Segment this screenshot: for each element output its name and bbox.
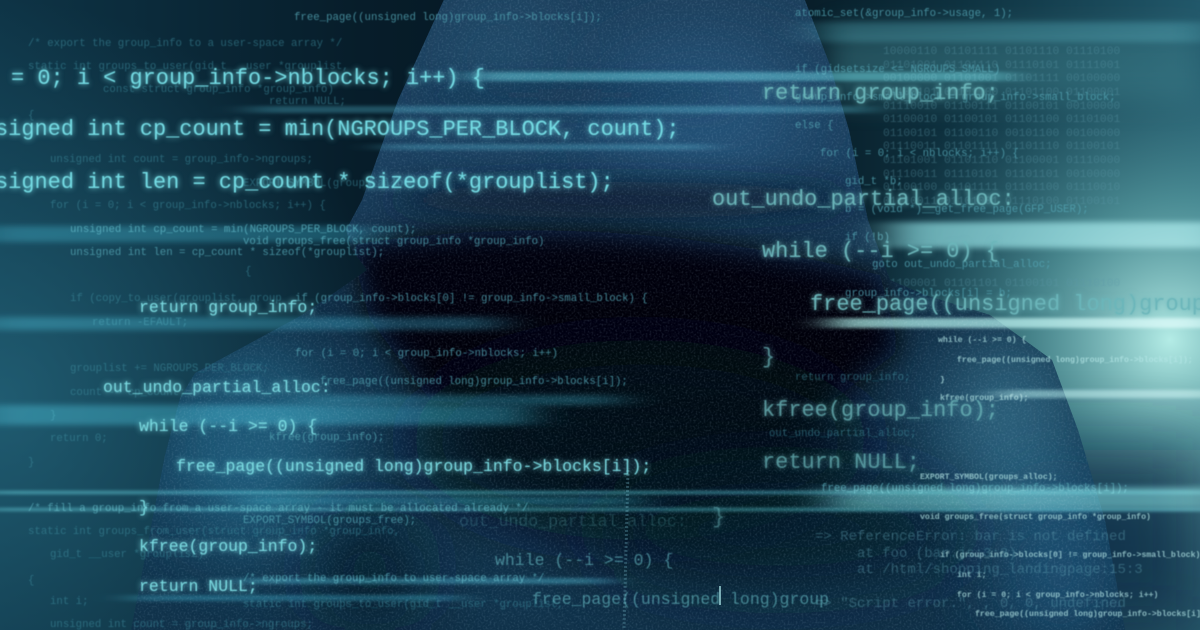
- small code right: if (!b): [845, 232, 890, 244]
- small code left: const struct group_info *group_info): [103, 84, 334, 96]
- small code left: unsigned int len = cp_count * sizeof(*grouplist);: [70, 247, 384, 259]
- small code left: int i;: [50, 596, 88, 608]
- small code left: count -= cp_count;: [70, 387, 185, 399]
- medium code left: [103, 298, 651, 596]
- small code left: EXPORT_SYMBOL(groups_alloc);: [243, 178, 423, 190]
- small code right: group_info->blocks[i] = b;: [845, 288, 1012, 300]
- large code right: [712, 81, 1200, 530]
- binary code block: 01110011 01101111 01101110 01100101: [883, 141, 1120, 153]
- medium code left: return NULL;: [139, 577, 258, 596]
- binary code block: 01110010 01100111 01100101 00100000: [883, 101, 1120, 113]
- large code right: return group_info;: [762, 81, 999, 106]
- cursor: [719, 586, 721, 605]
- small code right: int i;: [957, 570, 986, 580]
- small code right: for (i = 0; i < group_info->nblocks; i++): [957, 590, 1158, 600]
- large code right: return NULL;: [762, 450, 920, 475]
- left shoulder light: [165, 330, 335, 550]
- medium code left: out_undo_partial_alloc:: [103, 378, 331, 397]
- small code right: b = (void *)__get_free_page(GFP_USER);: [845, 204, 1089, 216]
- console error messages: => "Script error.", , 0, 0, undefined: [815, 596, 1126, 612]
- dim code center bottom: free_page((unsigned long)group: [532, 590, 829, 609]
- small code left: /* export the group_info to a user-space array */: [28, 38, 342, 50]
- chest shadow: [410, 340, 870, 540]
- small code right: goto out_undo_partial_alloc;: [872, 259, 1052, 271]
- small code left: if (group_info->blocks[0] != group_info->small_block) {: [295, 293, 648, 305]
- small code left: return 0;: [50, 433, 108, 445]
- small code right: group_info->small_block = group_info->small_block;: [795, 92, 1116, 104]
- large code left: = 0; i < group_info->nblocks; i++) {: [11, 66, 485, 91]
- binary code block: 01100001 01101101 01100101 01110100: [883, 278, 1120, 290]
- binary code block: 01100101 01101100 01101100 01100001: [883, 87, 1120, 99]
- medium code left: kfree(group_info);: [139, 537, 317, 556]
- console error messages: at foo (bar.js:3:3): [857, 546, 1017, 562]
- medium code left: free_page((unsigned long)group_info->blocks[i]);: [176, 457, 651, 476]
- console error messages: => ReferenceError: bar is not defined: [815, 529, 1126, 545]
- small code left: kfree(group_info);: [269, 432, 384, 444]
- small code left: void groups_free(struct group_info *group_info): [243, 236, 544, 248]
- hoodie zipper: [624, 470, 628, 630]
- binary code block: 00100000 01101001 01101111 00100000: [883, 73, 1120, 85]
- large code right: while (--i >= 0) {: [762, 239, 999, 264]
- small code left: }: [50, 410, 56, 422]
- large code right: out_undo_partial_alloc:: [712, 187, 1015, 212]
- small code right: free_page((unsigned long)group_info->blocks[i]);: [957, 355, 1193, 365]
- small code right: for (i = 0; i < nblocks; i++) {: [820, 148, 1019, 160]
- large code left: signed int len = cp_count * sizeof(*grouplist);: [0, 170, 614, 195]
- small code left: }: [28, 457, 34, 469]
- small code left: gid_t __user *grouplist): [50, 549, 204, 561]
- small code left: return NULL;: [269, 96, 346, 108]
- small code right: [769, 8, 1200, 619]
- large code right: kfree(group_info);: [762, 398, 999, 423]
- small code right: void groups_free(struct group_info *group_info): [920, 512, 1151, 522]
- medium code left: }: [139, 498, 149, 517]
- small code right: if (gidsetsize <= NGROUPS_SMALL): [795, 64, 1000, 76]
- binary code block: 01110011 01110101 01101101 00100000: [883, 169, 1120, 181]
- dim code center bottom: while (--i >= 0) {: [495, 551, 673, 570]
- small code left: for (i = 0; i < group_info->nblocks; i++) {: [50, 200, 326, 212]
- large code left: signed int cp_count = min(NGROUPS_PER_BLOCK, count);: [0, 117, 680, 142]
- small code left: static int groups_to_user(gid_t __user *grouplist,: [243, 599, 564, 611]
- small code left: {: [28, 110, 34, 122]
- binary code block: 01100100 01101111 01101100 01110010: [883, 182, 1120, 194]
- binary code block: 01100101 01100110 00101100 00100000: [883, 128, 1120, 140]
- dim code center bottom: out_undo_partial_alloc:: [459, 512, 687, 531]
- small code left: unsigned int count = group_info->ngroups;: [50, 154, 313, 166]
- binary code block: [883, 46, 1120, 290]
- small code left: free_page((unsigned long)group_info->blocks[i]);: [294, 12, 602, 24]
- face shadow: [350, 230, 900, 440]
- large code right: }: [712, 505, 725, 530]
- small code left: {: [28, 575, 34, 587]
- small code left: static int groups_to_user(gid_t __user *grouplist,: [28, 61, 349, 73]
- console error messages: at /html/shopping_landingpage:15:3: [857, 562, 1143, 578]
- hood folds: [390, 182, 850, 218]
- small code right: }: [940, 375, 945, 385]
- binary code block: 01101001 01101110 01100001 01110000: [883, 155, 1120, 167]
- small code right: return group_info;: [795, 372, 910, 384]
- large code left: [0, 66, 680, 195]
- small code right: EXPORT_SYMBOL(groups_alloc);: [920, 472, 1058, 482]
- small code left: if (copy_to_user(grouplist, group: [70, 293, 282, 305]
- small code left: grouplist += NGROUPS_PER_BLOCK;: [70, 363, 269, 375]
- small code right: while (--i >= 0) {: [938, 335, 1027, 345]
- small code right: out_undo_partial_alloc;: [769, 428, 917, 440]
- medium code left: while (--i >= 0) {: [139, 417, 317, 436]
- medium code left: return group_info;: [139, 298, 317, 317]
- small code left: EXPORT_SYMBOL(groups_free);: [243, 515, 416, 527]
- large code right: }: [762, 345, 775, 370]
- small code left: for (i = 0; i < group_info->nblocks; i++): [295, 348, 558, 360]
- small code left: /* export the group_info to user-space array */: [243, 573, 544, 585]
- binary code block: 01100010 01100101 01101100 01101001: [883, 114, 1120, 126]
- binary code block: 01110011 01101001 01110100 01100101: [883, 196, 1120, 208]
- small code right: if (group_info->blocks[0] != group_info->small_block): [940, 550, 1200, 560]
- right shoulder light: [940, 320, 1080, 520]
- small code left: return -EFAULT;: [92, 317, 188, 329]
- small code right: kfree(group_info);: [940, 393, 1028, 403]
- small code left: {: [245, 266, 251, 278]
- hood light top: [590, 40, 810, 180]
- console error messages: [815, 529, 1143, 612]
- small code left: free_page((unsigned long)group_info->blocks[i]);: [320, 376, 628, 388]
- small code right: atomic_set(&group_info->usage, 1);: [795, 8, 1013, 20]
- small code left: unsigned int cp_count = min(NGROUPS_PER_BLOCK, count);: [70, 224, 416, 236]
- dim code center bottom: [459, 512, 829, 609]
- small code left: static int groups_from_user(struct group_info *group_info,: [28, 526, 400, 538]
- small code right: gid_t *b;: [845, 176, 903, 188]
- binary code block: 01101001 01101110 01110101 01111001: [883, 60, 1120, 72]
- small code right: else {: [795, 120, 833, 132]
- small code left: [28, 12, 648, 630]
- small code left: /* fill a group_info from a user-space array - it must be allocated already */: [28, 503, 528, 515]
- binary code block: 10000110 01101111 01101110 01110100: [883, 46, 1120, 58]
- small code right: free_page((unsigned long)group_info->blocks[i]);: [821, 483, 1129, 495]
